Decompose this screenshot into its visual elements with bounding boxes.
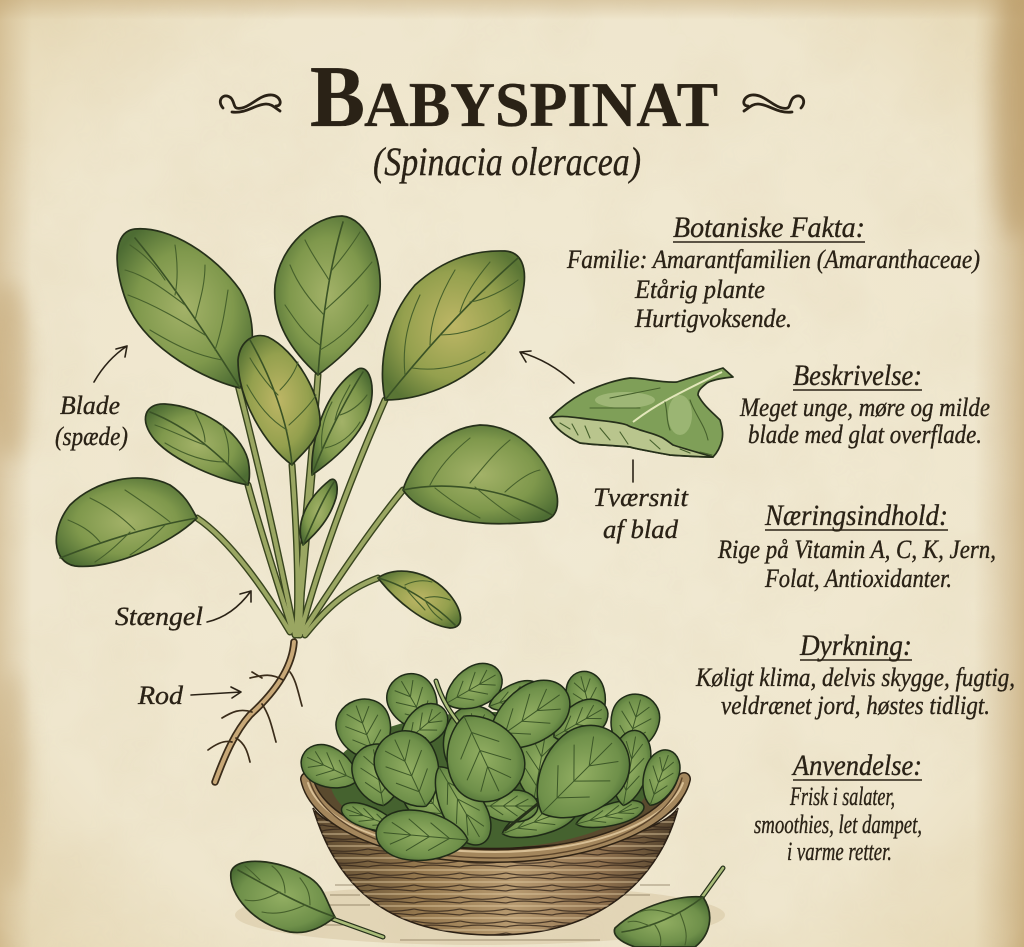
text: Dyrkning	[695, 629, 1015, 720]
leaf: small centre	[300, 479, 337, 545]
label: Tværsnit af blad: Tværsnit	[593, 483, 689, 512]
leaf: centre yellow	[238, 336, 320, 465]
text: Anvendelse: i varme retter.	[787, 837, 892, 866]
label: Tværsnit af blad: af blad	[603, 515, 679, 544]
basket back	[308, 732, 684, 848]
label: Tværsnit af blad	[593, 483, 689, 544]
label: Blade: (spæde)	[55, 422, 128, 451]
basket with spinach	[235, 655, 725, 945]
leaf: top left	[117, 229, 252, 388]
text: Botaniske Fakta: Etårig plante	[634, 275, 765, 304]
leaf: small centre right	[312, 368, 372, 475]
title: B	[310, 49, 365, 146]
basket body	[313, 808, 678, 935]
table shadow	[235, 885, 725, 945]
label: Rod	[137, 681, 241, 710]
label: Blade: Blade	[60, 391, 120, 420]
leaf: right large	[403, 425, 558, 524]
dark leaf mass	[330, 712, 650, 848]
text: Næringsindhold: Folat, Antioxidanter.	[764, 564, 952, 593]
text: Næringsindhold: Næringsindhold:	[764, 499, 948, 532]
label: Stængel: Stængel	[115, 602, 203, 631]
leaf: lower right small	[378, 571, 461, 628]
text: Anvendelse: Frisk i salater,	[789, 782, 895, 811]
icon: loose leaf right	[614, 868, 723, 947]
basket leaves	[294, 655, 686, 865]
ornament: right flourish	[744, 95, 804, 112]
leaf: top right	[383, 251, 524, 400]
text: Beskrivelse	[739, 359, 990, 449]
label: Rod: Rod	[137, 681, 184, 710]
leaf: top centre	[275, 216, 380, 375]
text: Beskrivelse: Meget unge, møre og milde	[739, 393, 990, 422]
label: Stængel	[115, 591, 251, 631]
title	[310, 49, 718, 146]
text: Beskrivelse: blade med glat overflade.	[748, 420, 982, 449]
text: Næringsindhold	[717, 499, 996, 593]
leaf: left middle	[145, 404, 250, 485]
label: Blade	[55, 346, 128, 451]
text: Anvendelse: smoothies, let dampet,	[754, 810, 922, 839]
text: Botaniske Fakta: Hurtigvoksende.	[634, 304, 792, 333]
text: Botaniske Fakta	[566, 211, 980, 333]
text: Botaniske Fakta: Botaniske Fakta:	[673, 211, 865, 244]
stems	[197, 375, 403, 635]
subtitle: (Spinacia oleracea)	[373, 139, 641, 184]
text: Anvendelse: Anvendelse:	[791, 749, 922, 782]
title: ABYSPINAT	[364, 69, 718, 140]
icon: loose leaf left	[231, 861, 383, 937]
text: Dyrkning: veldrænet jord, høstes tidligt.	[721, 691, 990, 720]
leaf: left large	[56, 478, 197, 566]
text: Dyrkning: Dyrkning:	[799, 629, 912, 662]
arrow: to cross-section	[520, 351, 574, 383]
text: Botaniske Fakta: Familie: Amarantfamilien (Amaranthaceae)	[566, 245, 980, 274]
ornament: left flourish	[220, 95, 280, 112]
plant illustration	[56, 216, 558, 782]
text: Beskrivelse: Beskrivelse:	[793, 359, 922, 392]
icon: leaf cross-section	[550, 368, 733, 482]
text: Anvendelse	[754, 749, 922, 866]
root	[208, 642, 302, 782]
text: Næringsindhold: Rige på Vitamin A, C, K, Jern,	[717, 535, 996, 564]
basket front rim	[307, 778, 684, 858]
